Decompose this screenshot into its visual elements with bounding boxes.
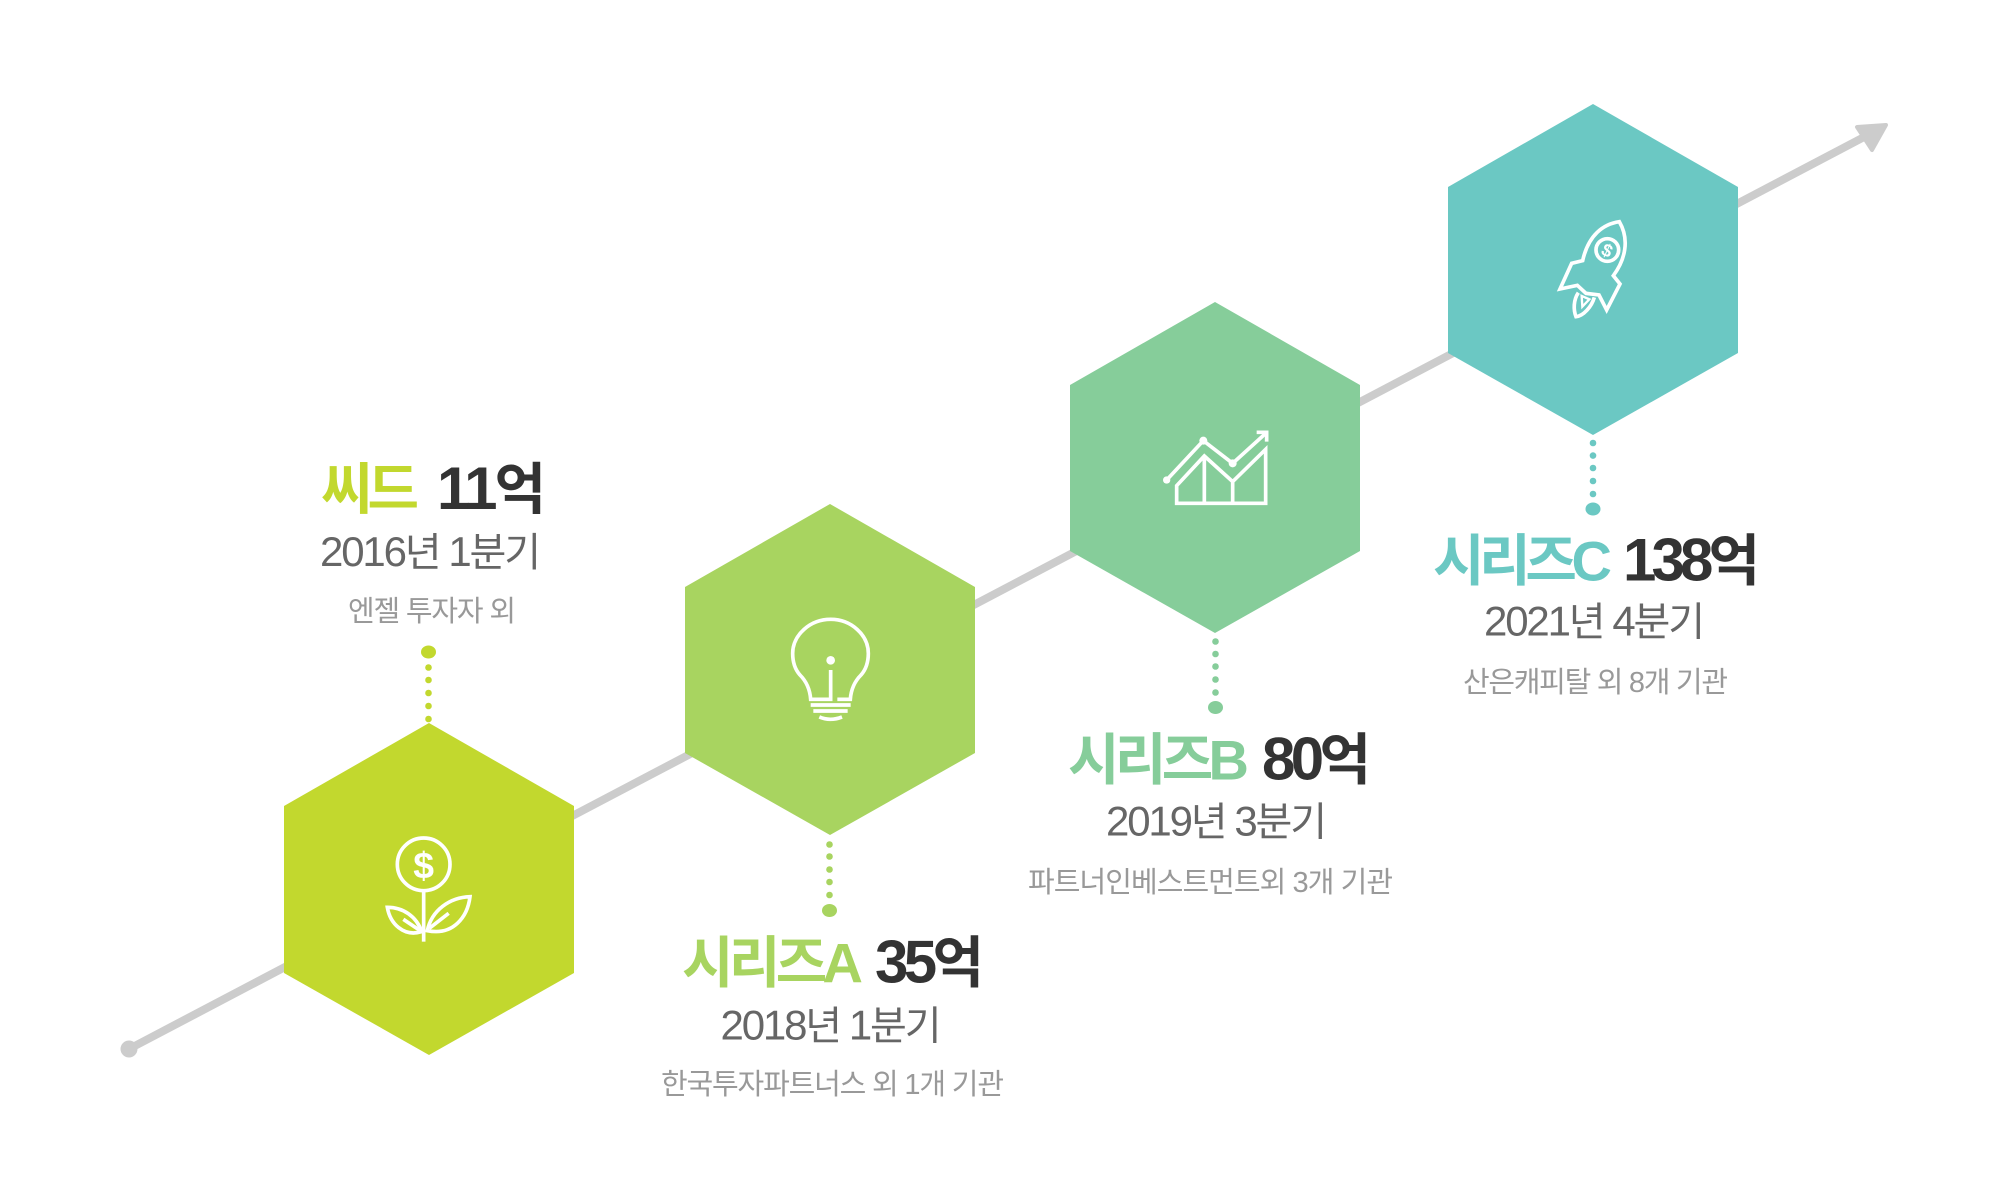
date: seed: 2016년 1분기 <box>320 528 541 575</box>
connector dots: series B <box>1208 638 1223 714</box>
icon: rocket <box>1560 222 1625 317</box>
connector dots: seed <box>421 646 436 722</box>
icon: money plant: $ <box>413 844 434 886</box>
heading: series B: 80억 <box>1262 726 1371 792</box>
investors: series C: 산은캐피탈 외 8개 기관 <box>1463 666 1728 699</box>
heading: seed: 11억 <box>437 455 546 522</box>
connector dots: series A <box>822 841 837 917</box>
icon: light bulb <box>793 619 868 719</box>
heading: series A: 35억 <box>875 928 984 996</box>
panel: seed stage <box>284 455 574 1055</box>
heading: series C: 138억 <box>1623 526 1760 594</box>
connector dots: series C <box>1586 440 1600 516</box>
heading: series A <box>682 928 984 996</box>
investors: seed: 엔젤 투자자 외 <box>348 596 516 628</box>
icon: money plant <box>387 838 470 942</box>
heading: series A: 시리즈A <box>682 932 863 994</box>
date: series C: 2021년 4분기 <box>1484 598 1705 644</box>
investors: series B: 파트너인베스트먼트외 3개 기관 <box>1028 866 1393 899</box>
investors: series A: 한국투자파트너스 외 1개 기관 <box>661 1069 1004 1101</box>
panel: series B <box>1028 302 1393 899</box>
icon: growth chart <box>1163 432 1267 503</box>
date: series B: 2019년 3분기 <box>1106 798 1327 844</box>
panel: series A <box>661 504 1004 1101</box>
heading: series B <box>1068 726 1371 792</box>
hexagon: series B <box>1070 302 1360 633</box>
panel: series C <box>1433 104 1760 699</box>
heading: series B: 시리즈B <box>1068 728 1249 792</box>
icon: rocket: $ <box>1598 239 1616 262</box>
heading: series C <box>1433 526 1760 594</box>
hexagon: series A <box>685 504 975 835</box>
heading: seed <box>321 455 546 522</box>
hexagon: series C <box>1448 104 1738 435</box>
heading: series C: 시리즈C <box>1433 530 1612 592</box>
timeline arrow <box>120 125 1886 1058</box>
heading: seed: 씨드 <box>321 458 419 521</box>
hexagon: seed <box>284 723 574 1055</box>
date: series A: 2018년 1분기 <box>720 1002 942 1048</box>
